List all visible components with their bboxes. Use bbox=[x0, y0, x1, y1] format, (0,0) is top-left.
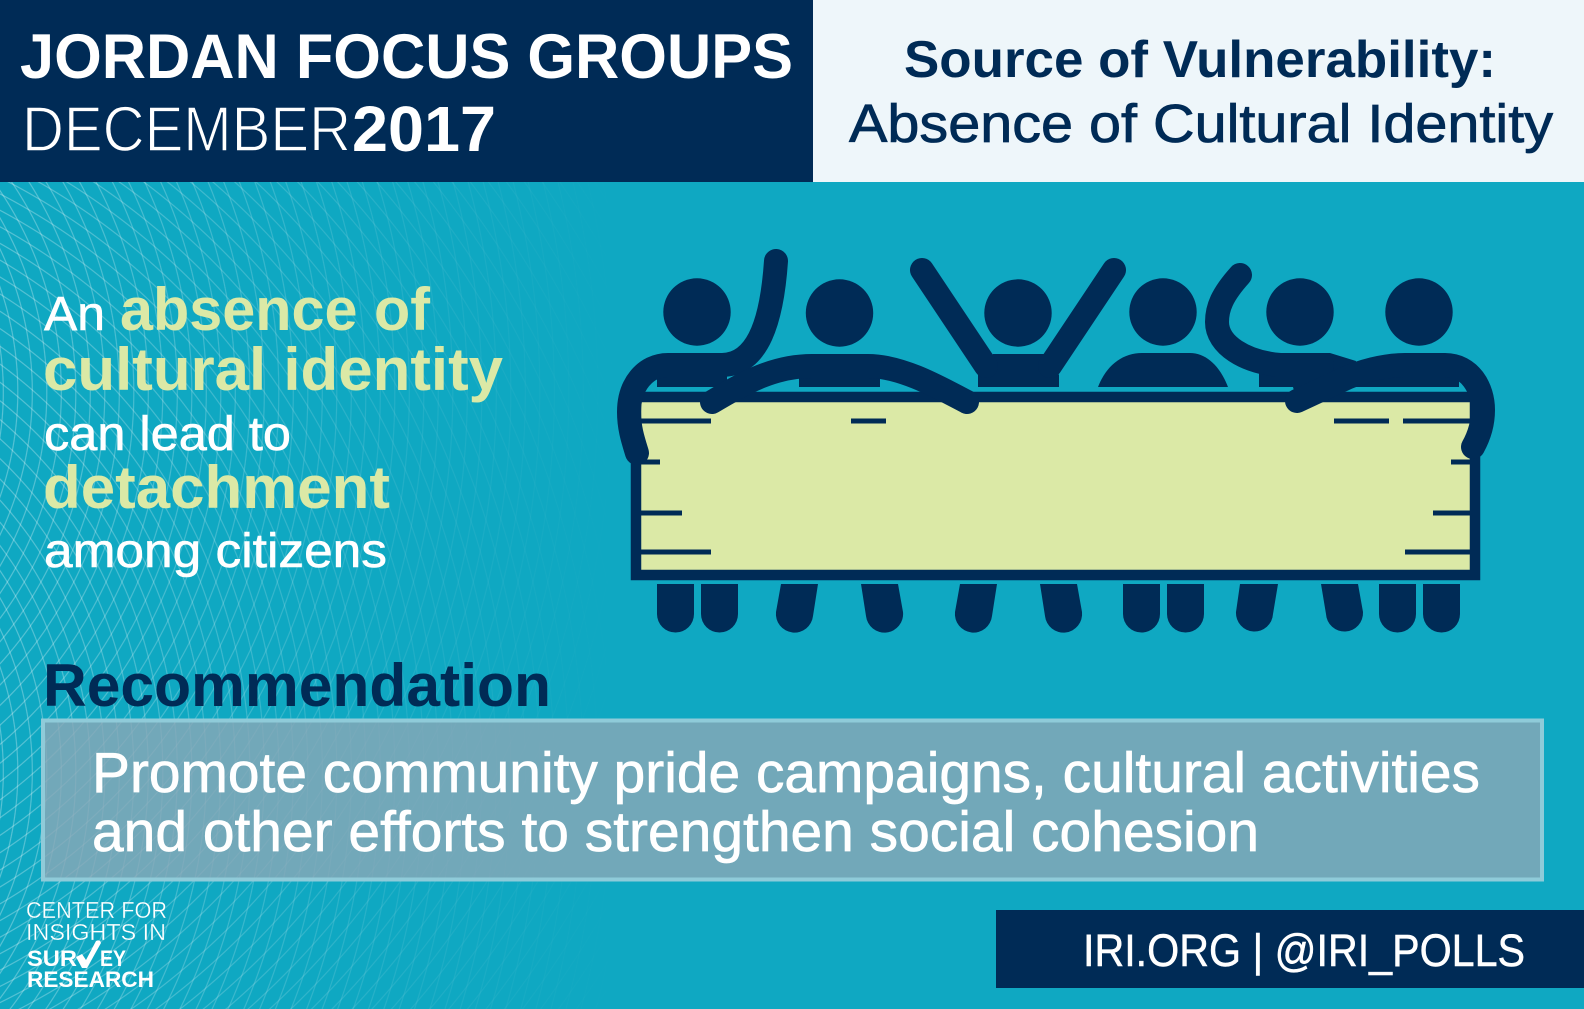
panel: title header bbox=[0, 0, 813, 182]
person 5 bbox=[1217, 275, 1363, 632]
recommendation text: and other efforts to strengthen social cohesion bbox=[92, 800, 1259, 864]
logo: Center for Insights in Survey Research: EY bbox=[100, 946, 126, 971]
logo: Center for Insights in Survey Research: RESEARCH bbox=[27, 967, 154, 992]
person 6 bbox=[1297, 278, 1483, 632]
text block: absence of cultural identity statement: absence of bbox=[120, 276, 431, 343]
icon: people holding a blank banner bbox=[629, 261, 1483, 633]
recommendation text: Promote community pride campaigns, cultural activities bbox=[92, 741, 1480, 805]
heading: recommendation: Recommendation bbox=[43, 652, 551, 719]
banner bbox=[636, 397, 1475, 575]
subheading: absence of cultural identity: Absence of Cultural Identity bbox=[849, 94, 1553, 154]
text block: absence of cultural identity statement: detachment bbox=[43, 454, 390, 521]
title: December 2017: DECEMBER bbox=[22, 93, 351, 165]
person 1 bbox=[629, 261, 776, 632]
person 2 bbox=[712, 279, 967, 633]
logo: Center for Insights in Survey Research: SUR bbox=[27, 946, 77, 971]
logo: Center for Insights in Survey Research bbox=[26, 897, 167, 992]
text block: absence of cultural identity statement: cultural identity bbox=[43, 336, 504, 403]
recommendation text bbox=[92, 741, 1480, 864]
person 4 bbox=[1098, 278, 1228, 632]
panel: website and handle bbox=[996, 910, 1584, 988]
icon: check mark bbox=[76, 940, 101, 968]
panel: source of vulnerability bbox=[813, 0, 1584, 182]
text block: absence of cultural identity statement: can lead to bbox=[44, 408, 291, 461]
heading: source of vulnerability: Source of Vulnerability: bbox=[904, 31, 1496, 89]
text block: absence of cultural identity statement: among citizens bbox=[44, 525, 387, 578]
title: December 2017: 2017 bbox=[352, 93, 496, 165]
title: Jordan Focus Groups: JORDAN FOCUS GROUPS bbox=[20, 22, 793, 92]
logo: Center for Insights in Survey Research: CENTER FOR bbox=[26, 897, 167, 923]
text block: absence of cultural identity statement: An bbox=[44, 288, 105, 341]
panel: recommendation box bbox=[43, 720, 1542, 880]
text block: absence of cultural identity statement bbox=[43, 276, 504, 578]
contact text: IRI.ORG | @IRI_POLLS bbox=[1083, 925, 1525, 976]
person 3 bbox=[922, 270, 1114, 633]
logo: Center for Insights in Survey Research: INSIGHTS IN bbox=[26, 919, 166, 945]
